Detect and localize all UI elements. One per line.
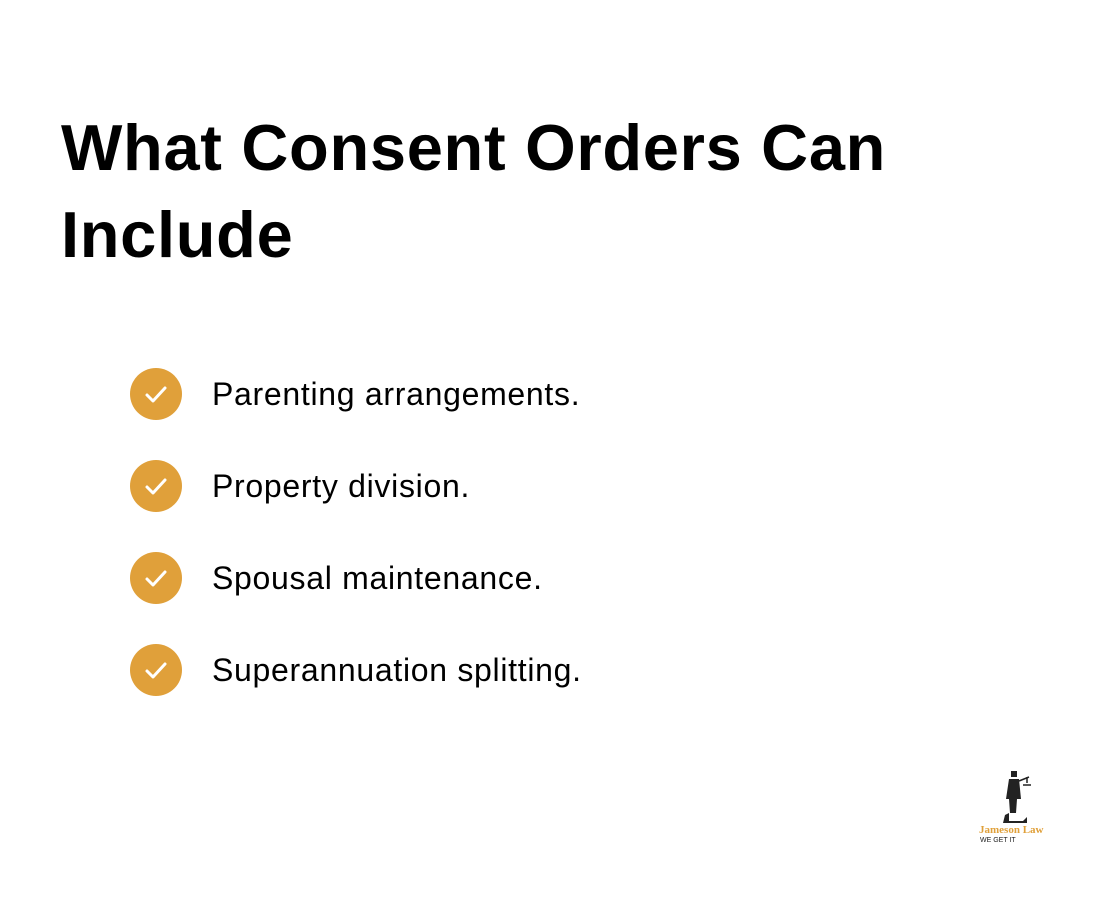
- item: property: [130, 460, 470, 512]
- text: Parenting arrangements.: [212, 376, 580, 412]
- icon: check: [130, 368, 182, 420]
- logo: WE GET IT: [980, 837, 1016, 844]
- item: super: [130, 644, 582, 696]
- text: Property division.: [212, 468, 470, 504]
- item: spousal: [130, 552, 543, 604]
- title: Include: [61, 198, 293, 271]
- logo: Jameson Law: [979, 824, 1044, 836]
- icon: check: [130, 460, 182, 512]
- icon: check: [130, 644, 182, 696]
- icon: check: [130, 552, 182, 604]
- logo: [979, 771, 1044, 844]
- text: Superannuation splitting.: [212, 652, 582, 688]
- title: [61, 111, 886, 271]
- title: What Consent Orders Can: [61, 111, 886, 184]
- text: Spousal maintenance.: [212, 560, 543, 596]
- item: parenting: [130, 368, 580, 420]
